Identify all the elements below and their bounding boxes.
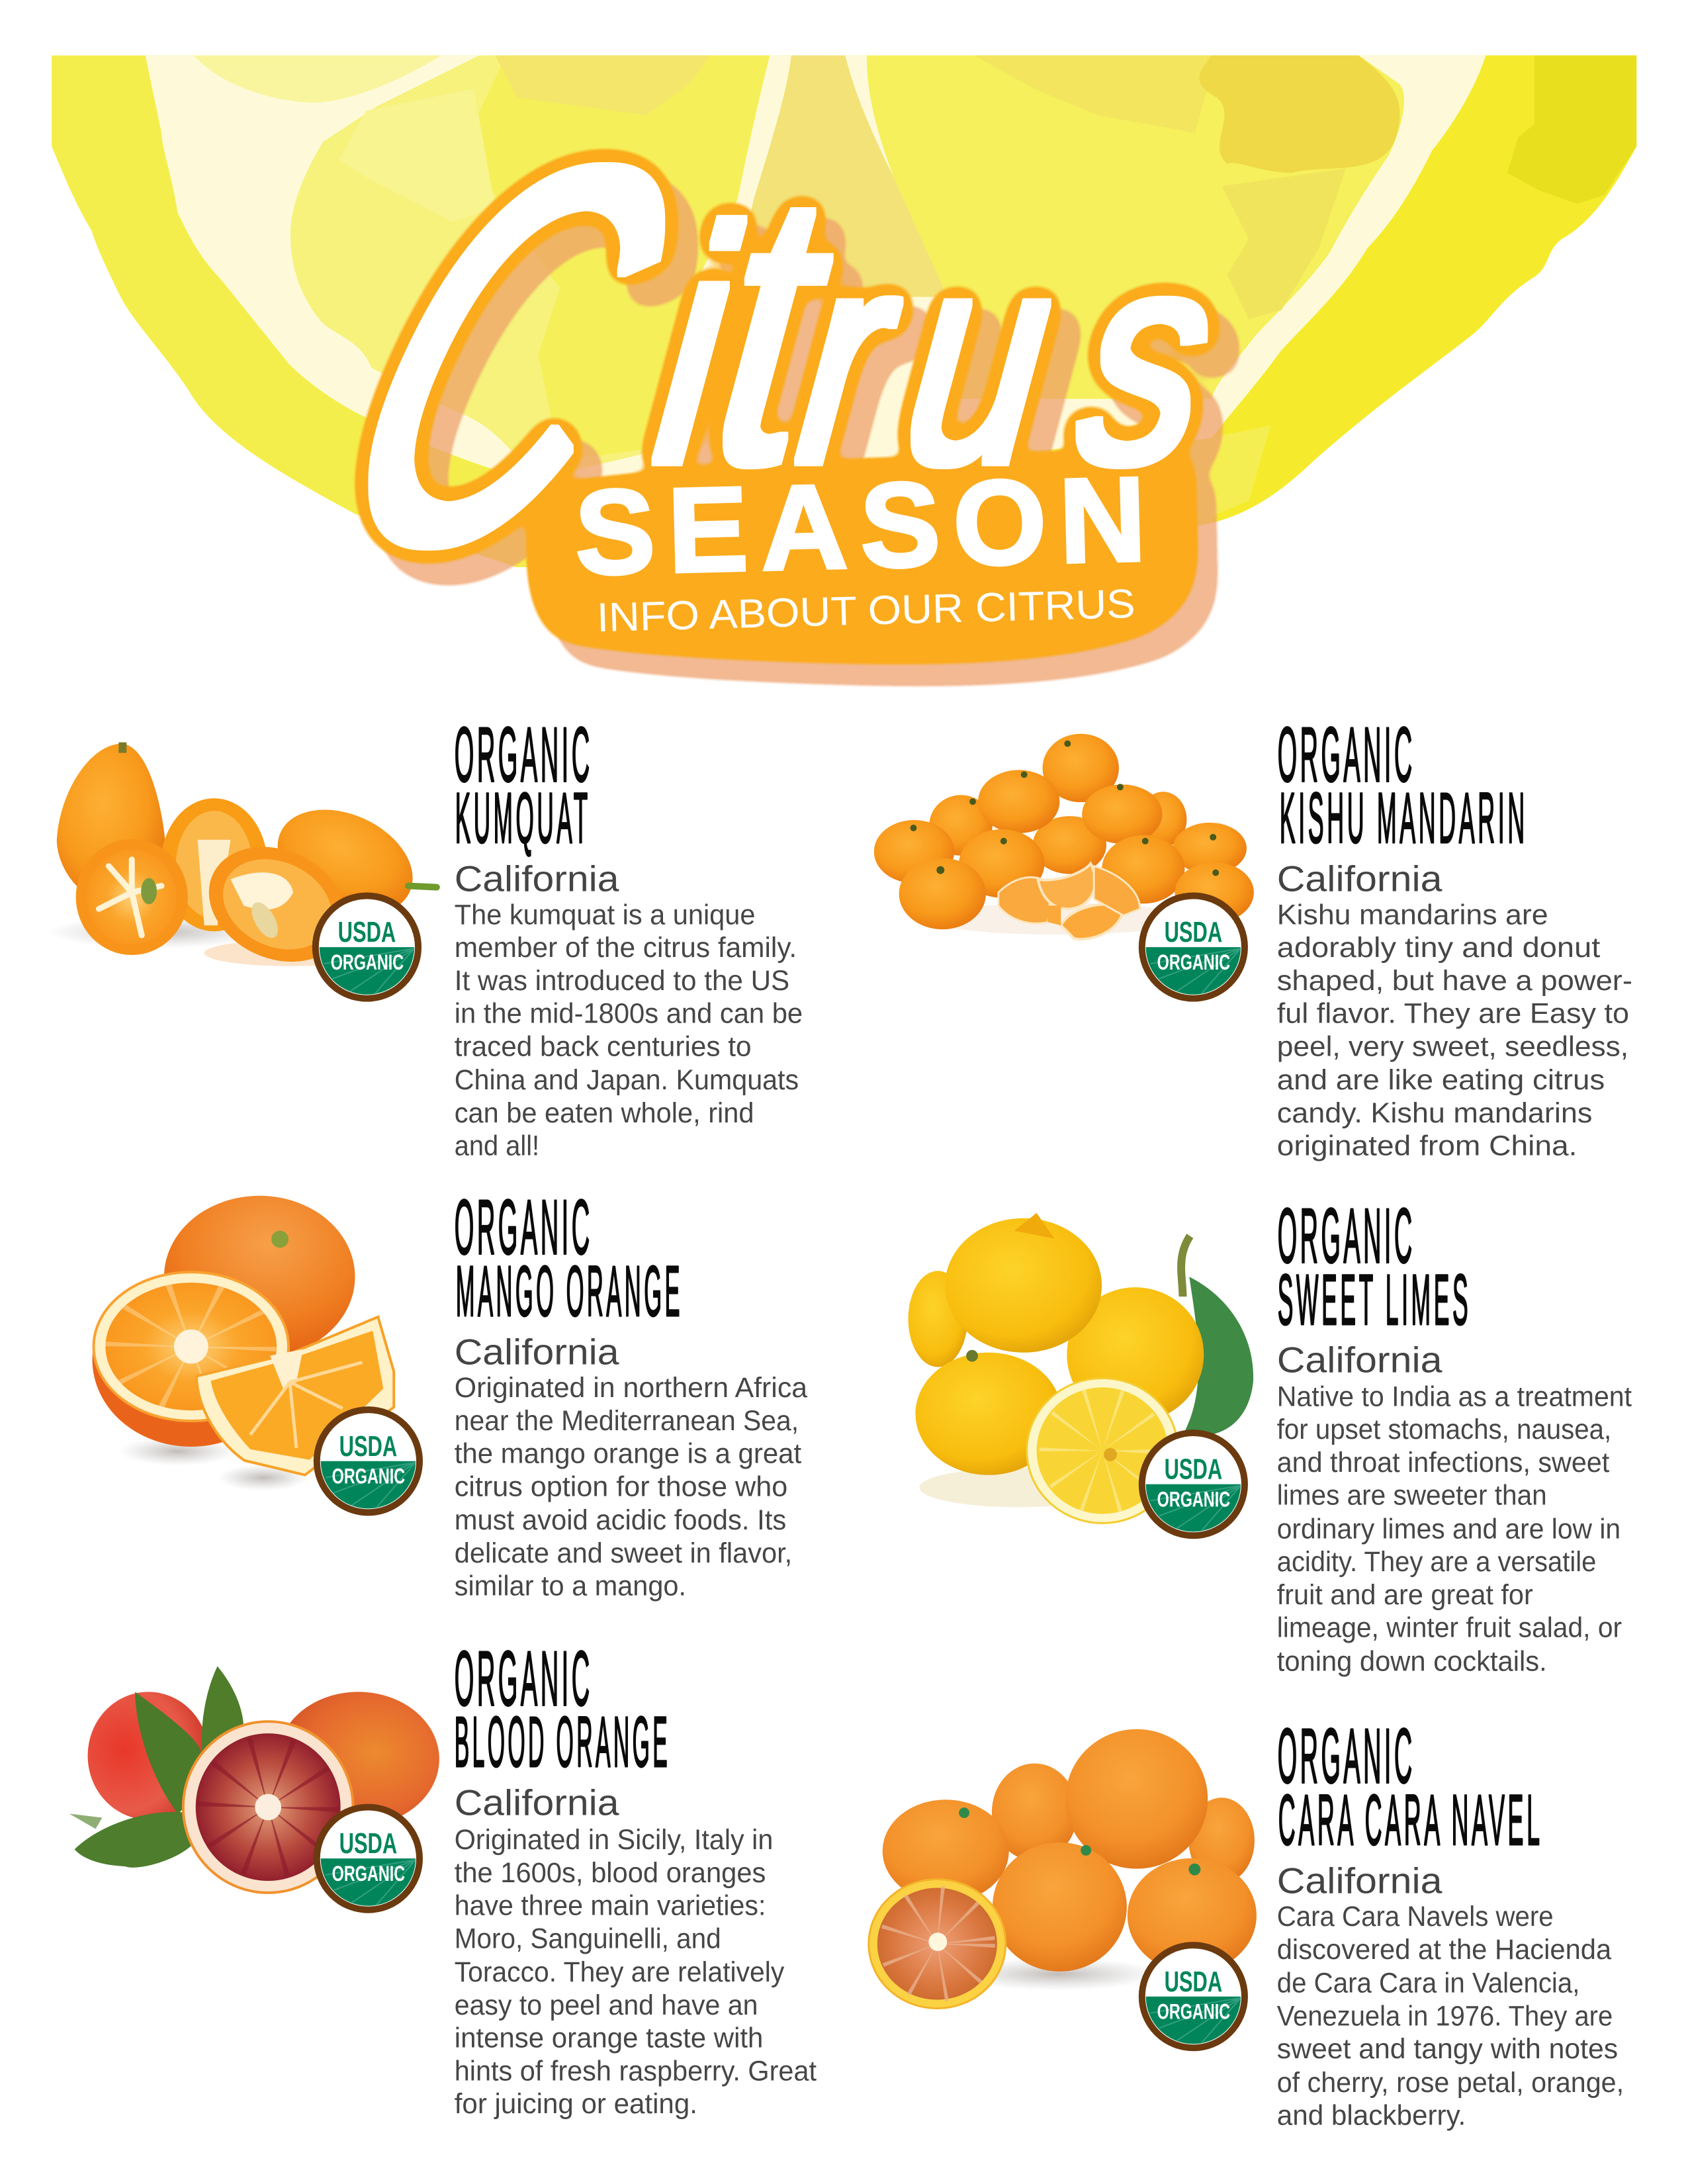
description [455, 899, 803, 1162]
panel: mango orange [93, 1183, 807, 1602]
badge: USDA organic [1142, 1945, 1245, 2048]
description: for upset stomachs, nausea, [1277, 1414, 1611, 1445]
description: originated from China. [1277, 1130, 1577, 1162]
description: and throat infections, sweet [1277, 1447, 1609, 1479]
panel: blood orange [69, 1635, 817, 2120]
description: toning down cocktails. [1277, 1645, 1547, 1677]
description: Moro, Sanguinelli, and [455, 1923, 721, 1954]
badge: USDA organic: USDA [339, 1827, 397, 1860]
heading: organic blood orange: ORGANIC [455, 1635, 593, 1721]
description: Kishu mandarins are [1277, 899, 1548, 931]
description: China and Japan. Kumquats [455, 1064, 799, 1096]
panel: kishu mandarin [874, 711, 1632, 1162]
badge: USDA organic [316, 895, 418, 999]
image: cara cara navels [869, 1729, 1257, 2009]
description: shaped, but have a power- [1277, 965, 1632, 997]
description: and are like eating citrus [1277, 1064, 1605, 1096]
description: candy. Kishu mandarins [1277, 1097, 1592, 1129]
heading: organic sweet limes [1278, 1192, 1471, 1340]
description: Toracco. They are relatively [455, 1956, 785, 1988]
badge: USDA organic: USDA [1165, 916, 1222, 948]
description: similar to a mango. [455, 1570, 686, 1602]
description: Native to India as a treatment [1277, 1381, 1632, 1412]
description: ful flavor. They are Easy to [1277, 998, 1629, 1030]
description: member of the citrus family. [455, 932, 797, 964]
description [455, 1824, 817, 2120]
description: traced back centuries to [455, 1030, 751, 1062]
badge: USDA organic: ORGANIC [332, 1861, 405, 1886]
description: ordinary limes and are low in [1277, 1513, 1621, 1545]
image: sweet limes [909, 1213, 1253, 1523]
badge: USDA organic: ORGANIC [332, 1464, 405, 1488]
panel: blood orange: BLOOD ORANGE [455, 1702, 670, 1782]
description: Venezuela in 1976. They are [1277, 2000, 1613, 2032]
panel: cara cara navel [869, 1712, 1624, 2132]
image: kishu mandarins [874, 734, 1254, 939]
description: peel, very sweet, seedless, [1277, 1030, 1628, 1062]
script letter C: C [253, 55, 766, 655]
heading: organic blood orange [455, 1635, 670, 1782]
badge: USDA organic: ORGANIC [1157, 950, 1230, 974]
lemon slice banner [52, 56, 1636, 567]
description: and all! [455, 1130, 539, 1162]
description: the 1600s, blood oranges [455, 1857, 766, 1889]
description: hints of fresh raspberry. Great [455, 2055, 817, 2087]
description: limeage, winter fruit salad, or [1277, 1612, 1622, 1644]
location: California [1277, 1340, 1443, 1381]
badge: USDA organic: USDA [1165, 1966, 1222, 1998]
description: de Cara Cara in Valencia, [1277, 1968, 1579, 1999]
description [455, 1372, 807, 1602]
description: sweet and tangy with notes [1277, 2033, 1618, 2065]
description: the mango orange is a great [455, 1438, 801, 1470]
badge: USDA organic: USDA [1165, 1453, 1222, 1486]
description: Originated in northern Africa [455, 1372, 807, 1404]
plaque behind Season [253, 55, 1275, 655]
subtitle: INFO ABOUT OUR CITRUS [596, 581, 1135, 641]
description: and blackberry. [1277, 2100, 1466, 2132]
description: Cara Cara Navels were [1277, 1901, 1554, 1933]
description: can be eaten whole, rind [455, 1097, 754, 1129]
description: acidity. They are a versatile [1277, 1546, 1596, 1578]
panel: kumquat [46, 711, 803, 1162]
description [1277, 1381, 1632, 1677]
description: It was introduced to the US [455, 965, 789, 997]
script letters itrus: rus [764, 188, 1255, 527]
badge: USDA organic: ORGANIC [1157, 1487, 1230, 1512]
badge: USDA organic [1142, 895, 1245, 999]
heading: organic mango orange [455, 1183, 683, 1331]
heading: organic kishu mandarin [1278, 711, 1528, 858]
description: near the Mediterranean Sea, [455, 1405, 799, 1437]
location: California [1277, 1860, 1443, 1901]
description: Originated in Sicily, Italy in [455, 1824, 773, 1856]
description [1277, 1901, 1624, 2132]
badge: USDA organic: USDA [339, 1430, 397, 1463]
panel: sweet limes [909, 1192, 1632, 1677]
heading: organic mango orange: ORGANIC [455, 1183, 593, 1270]
panel: kumquat: ORGANIC [455, 711, 593, 797]
image: kumquats [46, 743, 437, 983]
description: adorably tiny and donut [1277, 932, 1600, 964]
description: in the mid-1800s and can be [455, 998, 803, 1030]
description: delicate and sweet in flavor, [455, 1537, 792, 1569]
badge: USDA organic [317, 1807, 420, 1910]
badge: USDA organic [1142, 1433, 1245, 1535]
description: of cherry, rose petal, orange, [1277, 2067, 1624, 2099]
heading: organic cara cara navel [1278, 1712, 1543, 1860]
logo: Citrus script with backing plaque [253, 55, 1275, 655]
SEASON heading: SEASON [574, 453, 1147, 600]
badge: USDA organic: ORGANIC [1157, 1999, 1230, 2024]
badge: USDA organic: USDA [338, 916, 396, 948]
badge: USDA organic: ORGANIC [331, 950, 404, 974]
badge: USDA organic [317, 1410, 420, 1512]
location: California [455, 1331, 619, 1372]
description: intense orange taste with [455, 2023, 763, 2054]
script letters itrus: i [619, 158, 777, 534]
location: California [455, 1782, 619, 1823]
description: The kumquat is a unique [455, 899, 755, 931]
description: discovered at the Hacienda [1277, 1934, 1611, 1966]
description: have three main varieties: [455, 1890, 766, 1922]
location: California [1277, 858, 1443, 899]
description: must avoid acidic foods. Its [455, 1504, 786, 1536]
image: mango oranges [93, 1196, 394, 1491]
panel: kumquat: KUMQUAT [455, 778, 591, 858]
description: easy to peel and have an [455, 1989, 758, 2021]
description: fruit and are great for [1277, 1579, 1533, 1611]
description: limes are sweeter than [1277, 1480, 1547, 1512]
image: blood oranges [69, 1666, 439, 1893]
text: MANGO ORANGE [456, 1251, 683, 1331]
heading: organic kumquat [455, 711, 593, 858]
description: for juicing or eating. [455, 2088, 697, 2120]
description: citrus option for those who [455, 1471, 787, 1502]
location: California [455, 858, 619, 899]
script letters itrus: t [673, 111, 875, 545]
description [1277, 899, 1632, 1162]
